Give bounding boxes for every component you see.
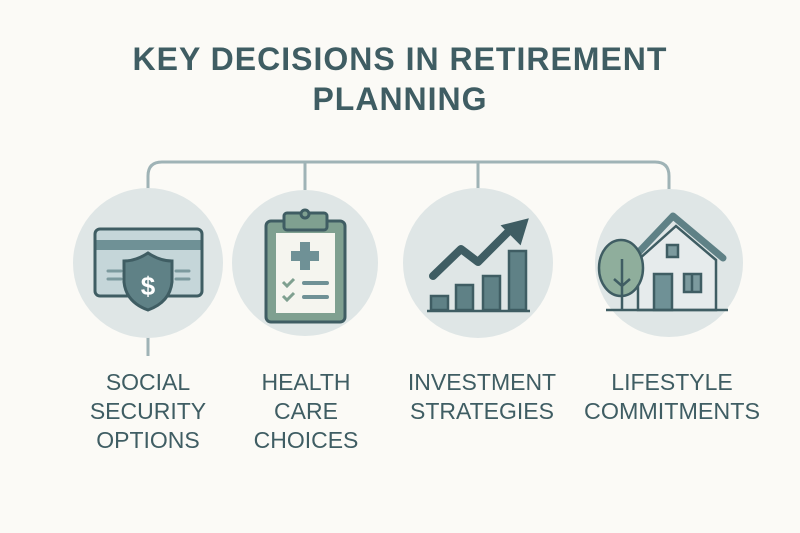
icon: clipboard: [266, 210, 345, 322]
label: lifestyle: [584, 369, 760, 424]
label: investment: [408, 369, 556, 424]
label: social security: [90, 369, 206, 453]
label: social security: SOCIAL: [106, 369, 190, 395]
label: health care: [254, 369, 358, 453]
label: health care: CARE: [274, 398, 338, 424]
panel: health care: [232, 190, 378, 336]
title: PLANNING: [312, 81, 488, 117]
label: investment: INVESTMENT: [408, 369, 556, 395]
icon: card with shield: $: [141, 271, 156, 301]
panel: lifestyle: [595, 189, 743, 337]
connector lines: [148, 162, 669, 356]
title: KEY DECISIONS IN RETIREMENT: [133, 41, 667, 77]
label: lifestyle: COMMITMENTS: [584, 398, 760, 424]
label: social security: SECURITY: [90, 398, 206, 424]
panel: social security: [73, 188, 223, 338]
icon: card with shield: [95, 229, 202, 310]
label: lifestyle: LIFESTYLE: [611, 369, 733, 395]
panel: investment: [403, 188, 553, 338]
labels: [90, 369, 760, 453]
label: health care: HEALTH: [261, 369, 351, 395]
icon: house and tree: [599, 216, 728, 310]
label: health care: CHOICES: [254, 427, 358, 453]
label: investment: STRATEGIES: [410, 398, 554, 424]
icon: bar chart with arrow: [427, 220, 530, 311]
title: [133, 41, 667, 117]
label: social security: OPTIONS: [96, 427, 200, 453]
